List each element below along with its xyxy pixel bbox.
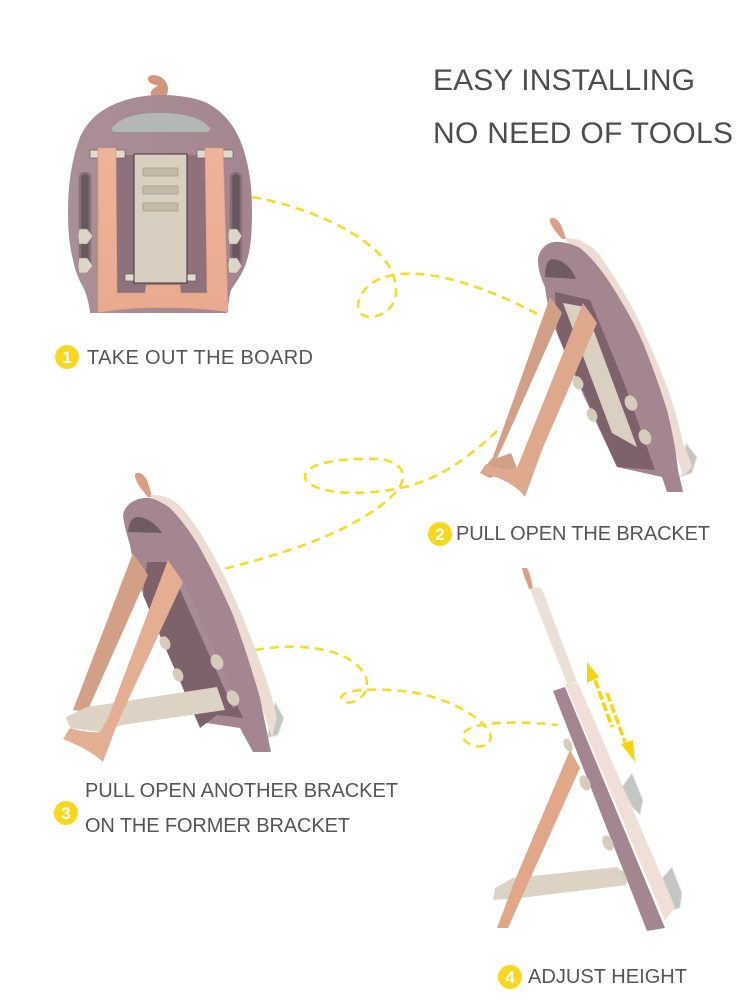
knobs [561, 737, 629, 886]
handle slot [112, 113, 210, 132]
top tray [622, 773, 643, 815]
icon: hanging loop [148, 75, 168, 97]
number badge [428, 522, 452, 546]
step 1 label: 1 [62, 348, 72, 367]
purple body [123, 498, 271, 752]
board step 3: second bracket [63, 473, 284, 762]
icon: hanging loop [550, 218, 566, 239]
board step 1: back view [68, 75, 252, 313]
number badge [55, 345, 79, 369]
extension plate [563, 303, 637, 447]
number badge [54, 801, 78, 825]
number badge [498, 965, 522, 989]
step 2 label: 2 [435, 525, 445, 544]
knobs [158, 635, 242, 708]
raised panel [530, 587, 577, 684]
front cream shell [150, 495, 277, 738]
purple body [553, 687, 665, 931]
side rail [178, 582, 238, 708]
extension plate [134, 154, 187, 283]
step 4 label: ADJUST HEIGHT [528, 966, 687, 988]
double-headed dashed height arrow [587, 662, 635, 762]
step 3 label: 3 [61, 804, 71, 823]
recessed centre [116, 155, 208, 293]
step 2 label: PULL OPEN THE BRACKET [456, 523, 710, 545]
bracket leg [497, 750, 580, 928]
step 1 label: TAKE OUT THE BOARD [87, 347, 313, 369]
title: EASY INSTALLING [433, 64, 695, 97]
knobs [571, 375, 654, 447]
bracket [98, 148, 228, 313]
right slot [231, 173, 241, 269]
plate ribs [143, 168, 178, 211]
front bracket leg and foot [480, 303, 597, 497]
dashed connector: step 3 to step 4 [255, 647, 558, 746]
board body [68, 95, 252, 313]
clips [90, 150, 233, 281]
icon: hanging loop [522, 568, 533, 589]
second bracket bar [66, 687, 225, 732]
title [433, 64, 733, 150]
tray [267, 702, 284, 738]
rear bracket leg [73, 553, 148, 712]
rear bracket leg [480, 297, 562, 478]
front bracket leg and foot [63, 560, 183, 762]
bottom tray [662, 867, 682, 910]
hex bolts [78, 229, 242, 273]
lower cream shell [565, 683, 675, 921]
front cream shell [565, 238, 692, 477]
rear cavity [143, 562, 243, 728]
second bracket bar [493, 867, 627, 900]
board step 2: open bracket [480, 218, 697, 497]
purple body [538, 242, 683, 492]
title: NO NEED OF TOOLS [433, 117, 733, 150]
rear cavity [555, 292, 655, 470]
dashed connector: step 2 to step 3 [218, 431, 497, 570]
icon: hanging loop [135, 473, 152, 497]
dashed connector: step 1 to step 2 [252, 197, 541, 317]
step 3 label: ON THE FORMER BRACKET [85, 815, 350, 837]
tray [681, 443, 697, 477]
handle slot [545, 259, 576, 279]
step 3 label [54, 780, 398, 837]
left slot [80, 173, 90, 269]
handle slot [128, 517, 162, 533]
board step 4: side view with adjustable height [493, 568, 682, 931]
step 3 label: PULL OPEN ANOTHER BRACKET [85, 780, 398, 802]
step 4 label: 4 [505, 968, 515, 987]
